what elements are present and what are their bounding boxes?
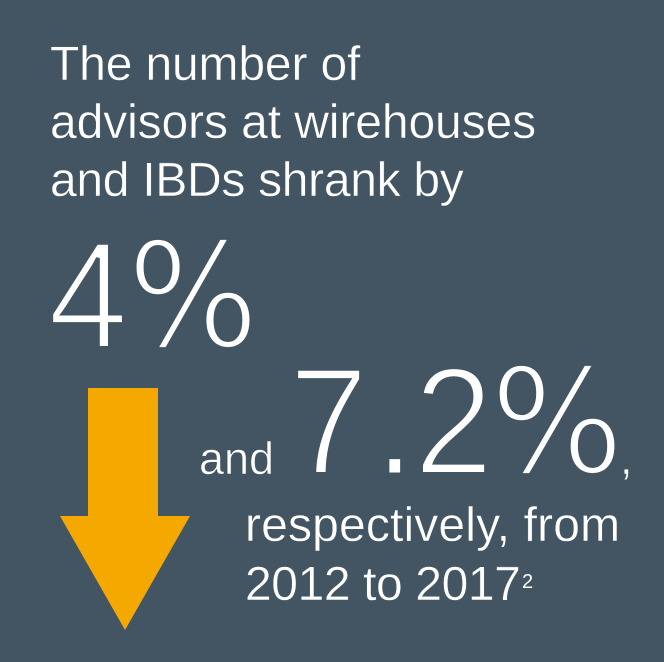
closing text: 2 bbox=[522, 571, 533, 593]
heading: and IBDs shrank by bbox=[50, 154, 463, 207]
icon: down arrow bbox=[60, 388, 190, 630]
statistic: 7.2%: 7 bbox=[289, 336, 368, 507]
statistic: 7.2% bbox=[289, 336, 624, 508]
statistic: 7.2%: 2 bbox=[414, 336, 493, 507]
statistic: 7.2%: % bbox=[490, 337, 624, 508]
statistic: 7.2%: . bbox=[374, 336, 414, 507]
statistic: 4% bbox=[48, 210, 259, 382]
closing text: 2012 to 2017 bbox=[245, 558, 520, 611]
comma: , bbox=[620, 433, 633, 484]
closing text bbox=[245, 499, 620, 611]
statistic: 4%: % bbox=[127, 211, 259, 382]
heading bbox=[50, 38, 536, 207]
heading: advisors at wirehouses bbox=[50, 96, 536, 149]
label: and: and bbox=[199, 433, 274, 484]
heading: The number of bbox=[50, 38, 360, 91]
statistic: 4%: 4 bbox=[48, 210, 128, 381]
closing text: respectively, from bbox=[245, 499, 620, 552]
